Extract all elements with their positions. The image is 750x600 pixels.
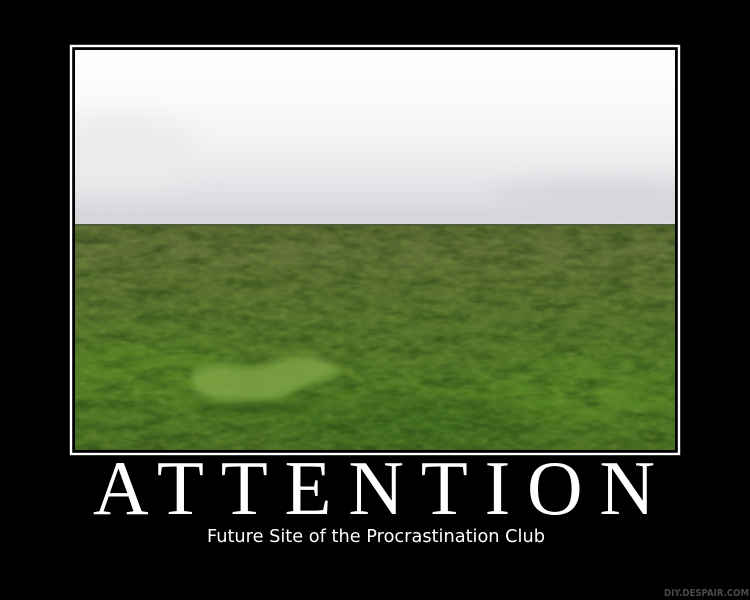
horizon line <box>75 224 675 226</box>
photo: empty grass field under cloudy sky <box>75 50 675 450</box>
sky <box>75 50 675 224</box>
dark hollow below tuft <box>195 402 315 414</box>
subtitle: Future Site of the Procrastination Club <box>207 526 545 547</box>
light grass tuft <box>190 356 342 404</box>
title: ATTENTION <box>93 445 655 531</box>
grass field <box>60 225 680 450</box>
white frame <box>71 46 679 454</box>
